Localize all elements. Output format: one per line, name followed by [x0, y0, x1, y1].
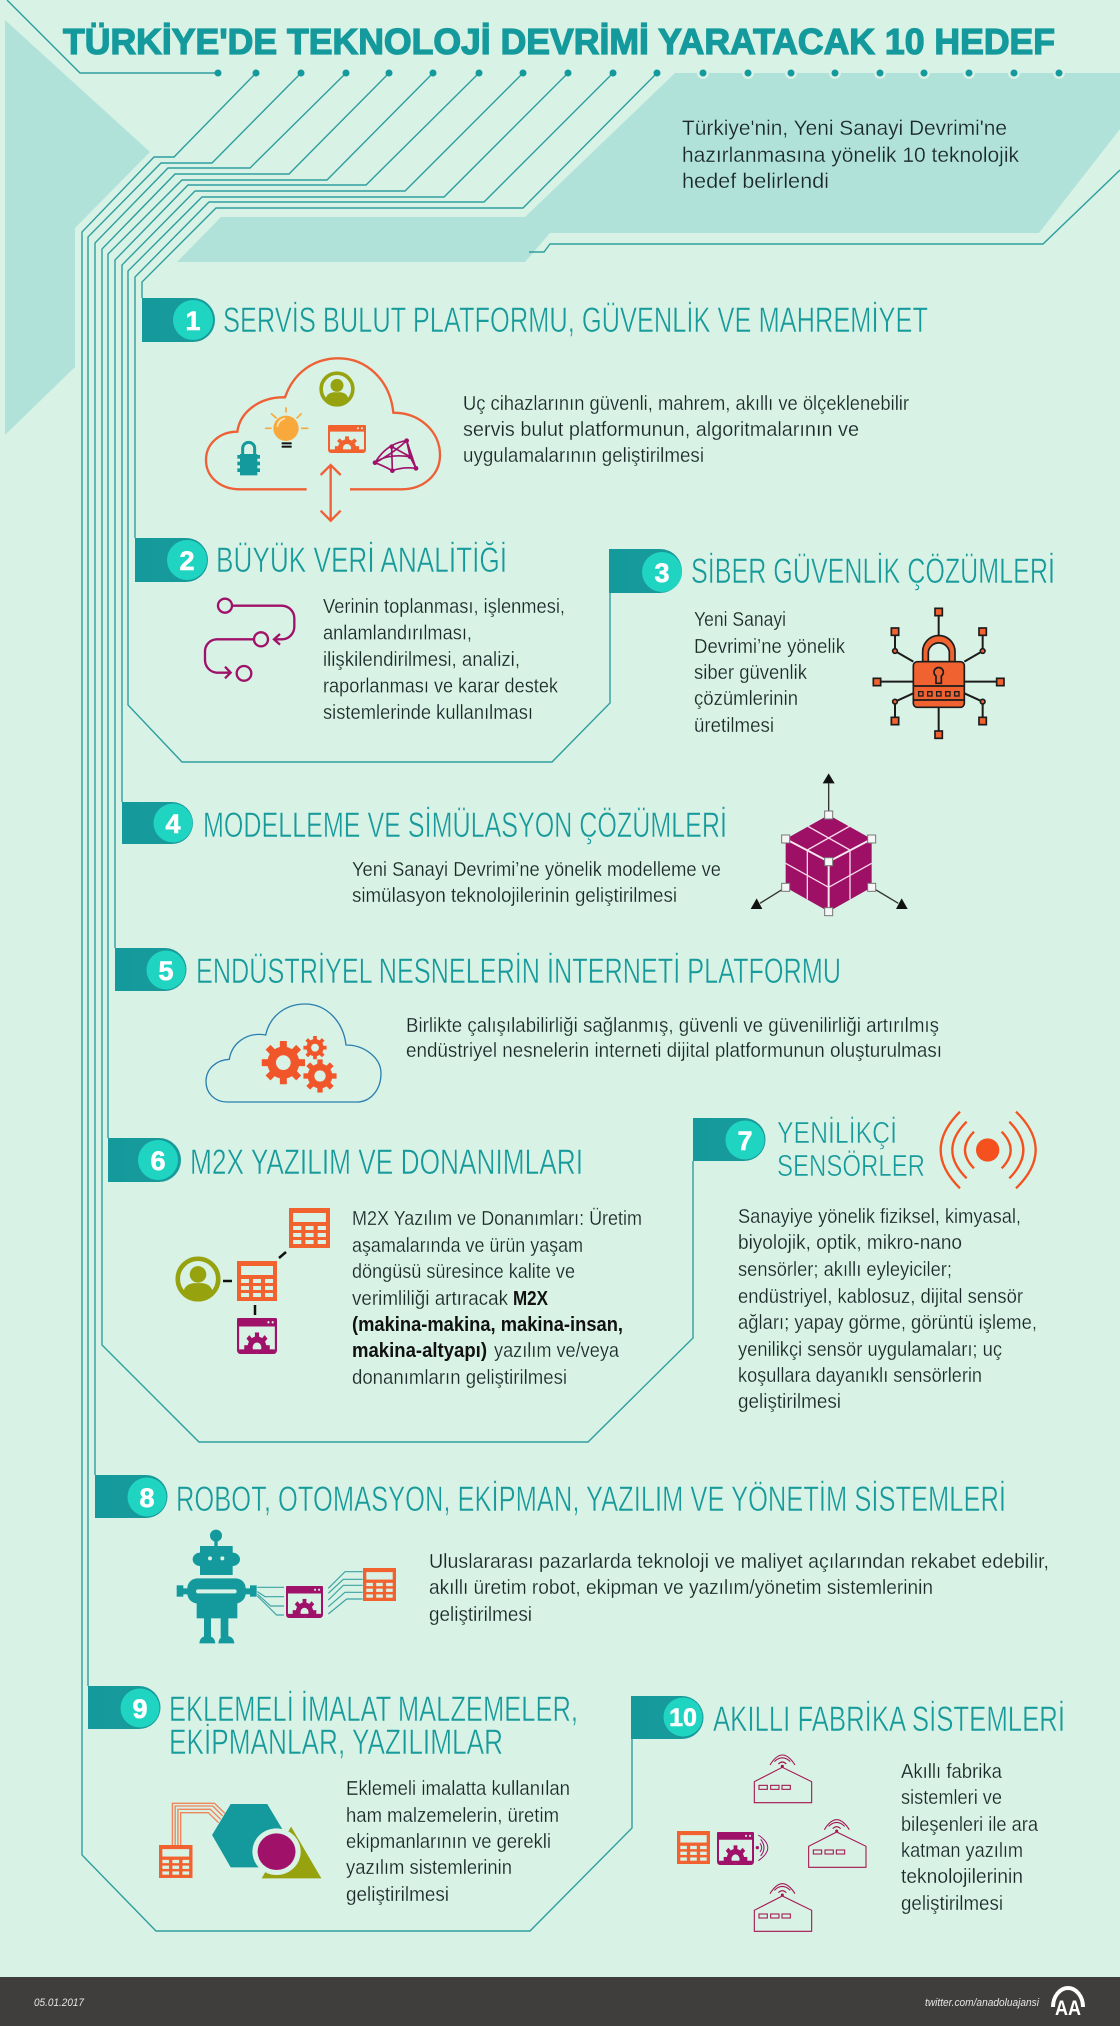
body 3 — [694, 609, 846, 737]
body 7: ağları; yapay görme, görüntü işleme, — [738, 1312, 1037, 1334]
body 6: aşamalarında ve ürün yaşam — [352, 1235, 583, 1257]
body 10 — [901, 1761, 1039, 1915]
body 6: verimliliği artıracak — [352, 1288, 509, 1310]
flag 8 — [95, 1475, 168, 1518]
flag 1: 1 — [185, 306, 201, 336]
section 4 — [122, 773, 908, 916]
body 7: endüstriyel, kablosuz, dijital sensör — [738, 1286, 1023, 1308]
body 8 — [429, 1551, 1049, 1626]
intro text: hazırlanmasına yönelik 10 teknolojik — [682, 144, 1019, 167]
section 7 — [693, 1112, 1037, 1413]
body 5: endüstriyel nesnelerin interneti dijital platformunun oluşturulması — [406, 1040, 942, 1062]
flag 2 — [135, 538, 208, 582]
flag 6 — [108, 1138, 181, 1182]
flag 3 — [609, 549, 682, 593]
heading 9: EKLEMELİ İMALAT MALZEMELER, — [169, 1690, 578, 1729]
flag 9 — [88, 1686, 160, 1729]
body 3: üretilmesi — [694, 715, 774, 737]
heading 7: YENİLİKÇİ — [777, 1115, 897, 1150]
flag 4 — [122, 802, 193, 844]
body 6: donanımların geliştirilmesi — [352, 1367, 567, 1389]
dots row — [214, 67, 1065, 79]
flag 7 — [693, 1118, 766, 1161]
body 3: Devrimi’ne yönelik — [694, 636, 846, 658]
AA logo: AA — [1055, 1997, 1081, 2020]
icon: M2X network — [178, 1208, 330, 1363]
body 8: geliştirilmesi — [429, 1604, 532, 1626]
body 7: Sanayiye yönelik fiziksel, kimyasal, — [738, 1206, 1021, 1228]
body 10: teknolojilerinin — [901, 1866, 1023, 1888]
body 5 — [406, 1015, 942, 1062]
section 6 — [108, 1138, 642, 1389]
body 9: ekipmanlarının ve gerekli — [346, 1831, 551, 1853]
flag 4: 4 — [165, 809, 181, 839]
icon: padlock network — [873, 608, 1004, 738]
icon: robot with window and calculator — [177, 1530, 396, 1643]
body 2: raporlanması ve karar destek — [323, 676, 559, 698]
section 8 — [95, 1475, 1049, 1643]
heading 9: EKİPMANLAR, YAZILIMLAR — [169, 1723, 503, 1762]
intro text — [682, 117, 1019, 193]
body 6: (makina-makina, makina-insan, — [352, 1314, 623, 1336]
flag 8: 8 — [139, 1483, 155, 1513]
flag 9: 9 — [132, 1694, 148, 1724]
body 9: geliştirilmesi — [346, 1884, 449, 1906]
body 4 — [352, 859, 721, 907]
flag 5 — [115, 948, 186, 991]
body 8: Uluslararası pazarlarda teknoloji ve maliyet açılarından rekabet edebilir, — [429, 1551, 1049, 1573]
heading 4: MODELLEME VE SİMÜLASYON ÇÖZÜMLERİ — [203, 806, 727, 845]
title: TÜRKİYE'DE TEKNOLOJİ DEVRİMİ YARATACAK 10 HEDEF — [63, 21, 1055, 62]
body 9: yazılım sistemlerinin — [346, 1857, 512, 1879]
body 5: Birlikte çalışılabilirliği sağlanmış, güvenli ve güvenilirliği artırılmış — [406, 1015, 939, 1037]
twitter handle: twitter.com/anadoluajansi — [925, 1997, 1040, 2009]
flag 10: 10 — [669, 1704, 697, 1732]
section 1 — [142, 298, 928, 521]
body 9: Eklemeli imalatta kullanılan — [346, 1778, 570, 1800]
icon: smart factories — [677, 1755, 866, 1931]
body 7: sensörler; akıllı eyleyiciler; — [738, 1259, 952, 1281]
body 10: katman yazılım — [901, 1840, 1023, 1862]
left background shape — [5, 20, 150, 435]
icon: cloud with services — [206, 358, 440, 521]
heading 2: BÜYÜK VERİ ANALİTİĞİ — [216, 541, 507, 580]
flag 6: 6 — [150, 1146, 166, 1176]
body 3: Yeni Sanayi — [694, 609, 786, 631]
body 7: biyolojik, optik, mikro-nano — [738, 1232, 962, 1254]
section 10 — [631, 1696, 1065, 1931]
heading 7 — [777, 1115, 925, 1183]
body 1 — [463, 393, 909, 467]
body 2: sistemlerinde kullanılması — [323, 702, 533, 724]
heading 5: ENDÜSTRİYEL NESNELERİN İNTERNETİ PLATFORMU — [196, 952, 841, 991]
body 9 — [346, 1778, 570, 1906]
body 1: Uç cihazlarının güvenli, mahrem, akıllı ve ölçeklenebilir — [463, 393, 909, 415]
heading 6: M2X YAZILIM VE DONANIMLARI — [190, 1143, 583, 1182]
flag 3: 3 — [654, 558, 670, 588]
body 6: makina-altyapı) — [352, 1340, 487, 1362]
heading 9 — [169, 1690, 578, 1762]
icon: cloud with gears — [206, 1004, 381, 1102]
body 6: M2X — [513, 1288, 549, 1310]
footer bar — [0, 1977, 1120, 2026]
body 9: ham malzemelerin, üretim — [346, 1805, 559, 1827]
body 1: servis bulut platformunun, algoritmalarının ve — [463, 419, 859, 441]
body 7: yenilikçi sensör uygulamaları; uç — [738, 1339, 1002, 1361]
body 3: siber güvenlik — [694, 662, 808, 684]
body 7: koşullara dayanıklı sensörlerin — [738, 1365, 982, 1387]
body 1: uygulamalarının geliştirilmesi — [463, 445, 704, 467]
body 7 — [738, 1206, 1037, 1413]
intro text: hedef belirlendi — [682, 170, 829, 193]
body 2: ilişkilendirilmesi, analizi, — [323, 649, 520, 671]
icon: 3D cube — [751, 773, 908, 916]
section 9 — [88, 1686, 578, 1906]
body 6 — [352, 1208, 642, 1389]
flag 2: 2 — [179, 546, 195, 576]
body 2 — [323, 596, 565, 724]
body 6: yazılım ve/veya — [494, 1340, 620, 1362]
flag 1 — [142, 298, 215, 342]
body 2: anlamlandırılması, — [323, 622, 472, 644]
body 4: simülasyon teknolojilerinin geliştirilmesi — [352, 885, 677, 907]
icon: additive manufacturing shapes — [159, 1803, 321, 1878]
body 3: çözümlerinin — [694, 688, 798, 710]
body 10: bileşenleri ile ara — [901, 1814, 1039, 1836]
top right background shape — [177, 73, 1120, 262]
AA logo — [1053, 1988, 1083, 2020]
section 5 — [115, 948, 942, 1102]
icon: data flow — [205, 599, 294, 681]
icon: sensor waves — [941, 1112, 1036, 1188]
flag 10 — [631, 1696, 704, 1739]
body 10: sistemleri ve — [901, 1787, 1002, 1809]
body 2: Verinin toplanması, işlenmesi, — [323, 596, 565, 618]
flag 5: 5 — [158, 956, 174, 986]
body 8: akıllı üretim robot, ekipman ve yazılım/yönetim sistemlerinin — [429, 1577, 933, 1599]
body 4: Yeni Sanayi Devrimi’ne yönelik modelleme ve — [352, 859, 721, 881]
intro text: Türkiye'nin, Yeni Sanayi Devrimi'ne — [682, 117, 1007, 140]
heading 7: SENSÖRLER — [777, 1148, 925, 1183]
section 3 — [609, 549, 1055, 738]
date: 05.01.2017 — [34, 1997, 85, 2009]
body 10: Akıllı fabrika — [901, 1761, 1003, 1783]
flag 7: 7 — [737, 1126, 753, 1156]
body 6: döngüsü süresince kalite ve — [352, 1261, 575, 1283]
body 6: M2X Yazılım ve Donanımları: Üretim — [352, 1208, 642, 1230]
body 10: geliştirilmesi — [901, 1893, 1003, 1915]
body 7: geliştirilmesi — [738, 1391, 841, 1413]
section 2 — [135, 538, 565, 724]
